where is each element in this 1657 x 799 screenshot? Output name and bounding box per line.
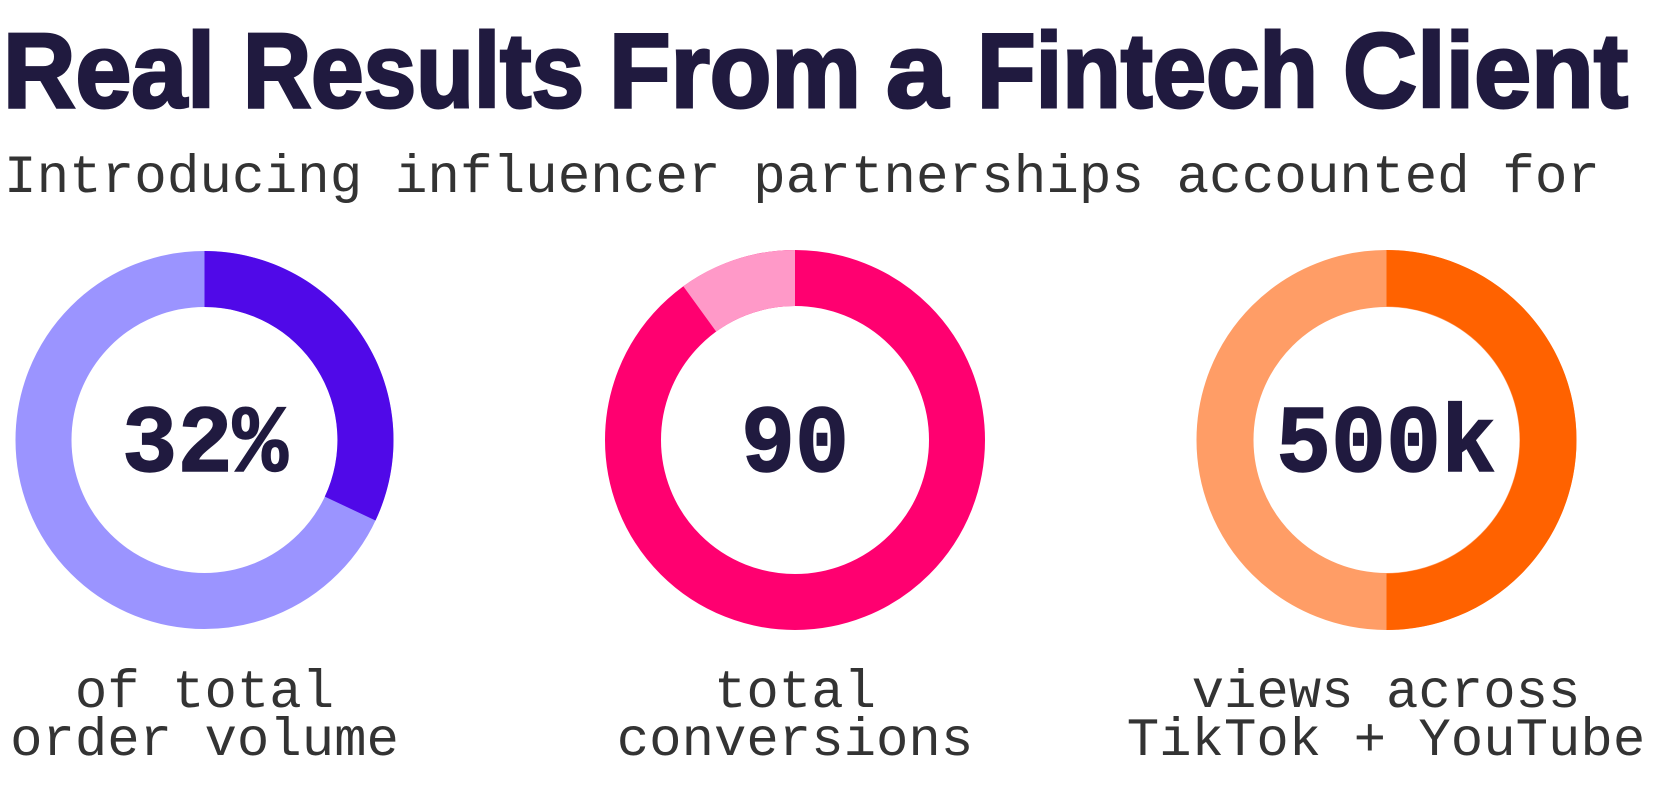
donut chart: 90 <box>633 250 957 602</box>
caption: views across TikTok + YouTube <box>1127 663 1645 772</box>
title: a <box>886 12 949 130</box>
subtitle: Introducing influencer partnerships accounted for <box>4 148 1600 209</box>
value: 90: 90 <box>741 391 849 500</box>
title: Client <box>1343 12 1628 130</box>
title: Real <box>3 12 215 130</box>
value: 32%: 32% <box>122 391 288 500</box>
caption: of total order volume: of total <box>75 663 334 724</box>
caption: total conversions: total <box>714 663 876 724</box>
title <box>3 12 1628 130</box>
caption: views across TikTok + YouTube: views across <box>1192 663 1580 724</box>
title: Fintech <box>977 12 1318 130</box>
caption: total conversions: conversions <box>617 711 973 772</box>
panel: conversions <box>617 250 973 772</box>
value: 500k: 500k <box>1276 391 1496 500</box>
donut chart: 500k <box>1225 250 1577 630</box>
caption: views across TikTok + YouTube: TikTok + YouTube <box>1127 711 1645 772</box>
caption: of total order volume: order volume <box>10 711 399 772</box>
caption: of total order volume <box>10 663 399 772</box>
title: From <box>609 12 861 130</box>
caption: total conversions <box>617 663 973 772</box>
panel: order volume <box>10 251 399 772</box>
donut chart: 32% <box>44 251 394 601</box>
panel: views <box>1127 250 1645 772</box>
title: Results <box>243 12 584 130</box>
